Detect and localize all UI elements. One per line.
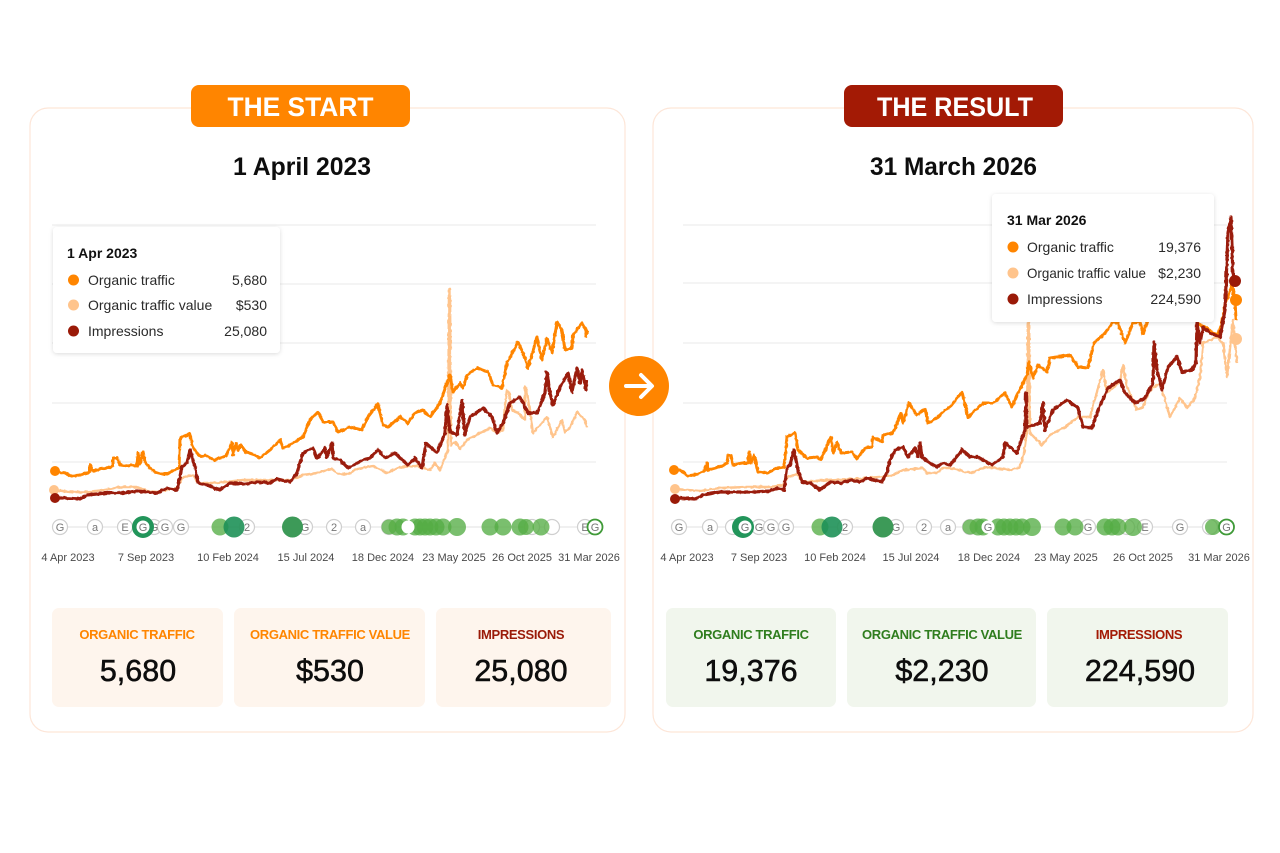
date axis: result (660, 552, 1250, 564)
timeline markers: start: G (301, 522, 309, 534)
stat card: organic traffic: ORGANIC TRAFFIC (79, 627, 196, 642)
timeline markers: result: G (984, 522, 992, 534)
date axis: start (41, 552, 620, 564)
date axis: result: 10 Feb 2024 (804, 552, 866, 564)
heading: start date: 1 April 2023 (233, 153, 371, 181)
tooltip: start: 5,680 (232, 272, 267, 288)
timeline markers: result: E (1141, 522, 1149, 534)
stat card: organic traffic: 5,680 (100, 654, 176, 688)
stat card: organic traffic value (234, 608, 425, 707)
date axis: result: 15 Jul 2024 (883, 552, 939, 564)
timeline markers: start: a (360, 522, 367, 534)
tooltip: start: $530 (236, 297, 267, 313)
timeline markers: start: G (177, 522, 185, 534)
timeline markers: start: G (56, 522, 64, 534)
tooltip: result: Organic traffic (1027, 239, 1114, 255)
timeline markers: result: G (1176, 522, 1184, 534)
stat card: organic traffic value: $2,230 (895, 654, 989, 688)
date axis: start: 31 Mar 2026 (558, 552, 620, 564)
timeline markers: result: a (945, 522, 952, 534)
tooltip: result: 19,376 (1158, 239, 1201, 255)
arrow: start to result (609, 356, 669, 416)
timeline markers: start: a (92, 522, 99, 534)
date axis: start: 26 Oct 2025 (492, 552, 552, 564)
tooltip: result: $2,230 (1158, 265, 1201, 281)
tooltip: start: 25,080 (224, 323, 267, 339)
date axis: result: 4 Apr 2023 (660, 552, 714, 564)
panel: the start (30, 85, 625, 732)
timeline markers: result: G (782, 522, 790, 534)
timeline markers: result: G (675, 522, 683, 534)
date axis: start: 15 Jul 2024 (278, 552, 334, 564)
stat card: impressions: IMPRESSIONS (478, 627, 565, 642)
tooltip: start: Organic traffic (88, 272, 175, 288)
stat card: impressions (436, 608, 611, 707)
timeline markers: result: G (755, 522, 763, 534)
line chart: result (669, 217, 1242, 504)
tooltip: start (53, 227, 280, 353)
timeline markers: result (672, 516, 1234, 538)
timeline markers: start: E (121, 522, 129, 534)
timeline markers: result: a (707, 522, 714, 534)
tooltip: start: Organic traffic value (88, 297, 212, 313)
date axis: start: 4 Apr 2023 (41, 552, 95, 564)
timeline markers: result: G (892, 522, 900, 534)
date axis: start: 10 Feb 2024 (197, 552, 259, 564)
date axis: start: 18 Dec 2024 (352, 552, 414, 564)
stat card: organic traffic (52, 608, 223, 707)
timeline markers: result: 2 (842, 522, 848, 534)
timeline markers: result: G (767, 522, 775, 534)
date axis: result: 26 Oct 2025 (1113, 552, 1173, 564)
timeline markers: start: G (139, 522, 147, 534)
heading: result date: 31 March 2026 (870, 153, 1037, 181)
timeline markers: start: G (161, 522, 169, 534)
stat card: organic traffic: 19,376 (704, 654, 798, 688)
tooltip: start: 1 Apr 2023 (67, 245, 138, 261)
stat card: organic traffic (666, 608, 836, 707)
timeline markers: start: G (591, 522, 599, 534)
tooltip: start: Impressions (88, 323, 163, 339)
tooltip: result: 31 Mar 2026 (1007, 212, 1087, 228)
stat card: impressions: 224,590 (1085, 654, 1195, 688)
timeline markers: start: 2 (244, 522, 250, 534)
timeline markers: start: E (581, 522, 589, 534)
timeline markers: start (52, 516, 602, 538)
timeline markers: result: 2 (921, 522, 927, 534)
panel: the result (653, 85, 1253, 732)
badge: the start (191, 85, 410, 127)
stat card: impressions: 25,080 (474, 654, 568, 688)
timeline markers: start: G (150, 522, 158, 534)
date axis: result: 7 Sep 2023 (731, 552, 787, 564)
stat card: impressions (1047, 608, 1228, 707)
tooltip: result: 224,590 (1150, 291, 1201, 307)
timeline markers: start: 2 (331, 522, 337, 534)
date axis: result: 18 Dec 2024 (958, 552, 1020, 564)
stat card: organic traffic: ORGANIC TRAFFIC (693, 627, 810, 642)
badge: the result: THE RESULT (877, 92, 1033, 122)
badge: the result (844, 85, 1063, 127)
stat card: impressions: IMPRESSIONS (1096, 627, 1183, 642)
stat card: organic traffic value: ORGANIC TRAFFIC VALUE (862, 627, 1023, 642)
timeline markers: result: G (1084, 522, 1092, 534)
date axis: result: 31 Mar 2026 (1188, 552, 1250, 564)
date axis: start: 23 May 2025 (422, 552, 486, 564)
line chart: start (49, 225, 596, 503)
tooltip: result: Organic traffic value (1027, 265, 1146, 281)
date axis: result: 23 May 2025 (1034, 552, 1098, 564)
stat card: organic traffic value: $530 (296, 654, 364, 688)
timeline markers: result: G (741, 522, 749, 534)
timeline markers: result: G (1222, 522, 1231, 534)
stat card: organic traffic value (847, 608, 1036, 707)
date axis: start: 7 Sep 2023 (118, 552, 174, 564)
tooltip: result (992, 194, 1214, 322)
tooltip: result: Impressions (1027, 291, 1102, 307)
badge: the start: THE START (228, 92, 374, 122)
stat card: organic traffic value: ORGANIC TRAFFIC VALUE (250, 627, 411, 642)
